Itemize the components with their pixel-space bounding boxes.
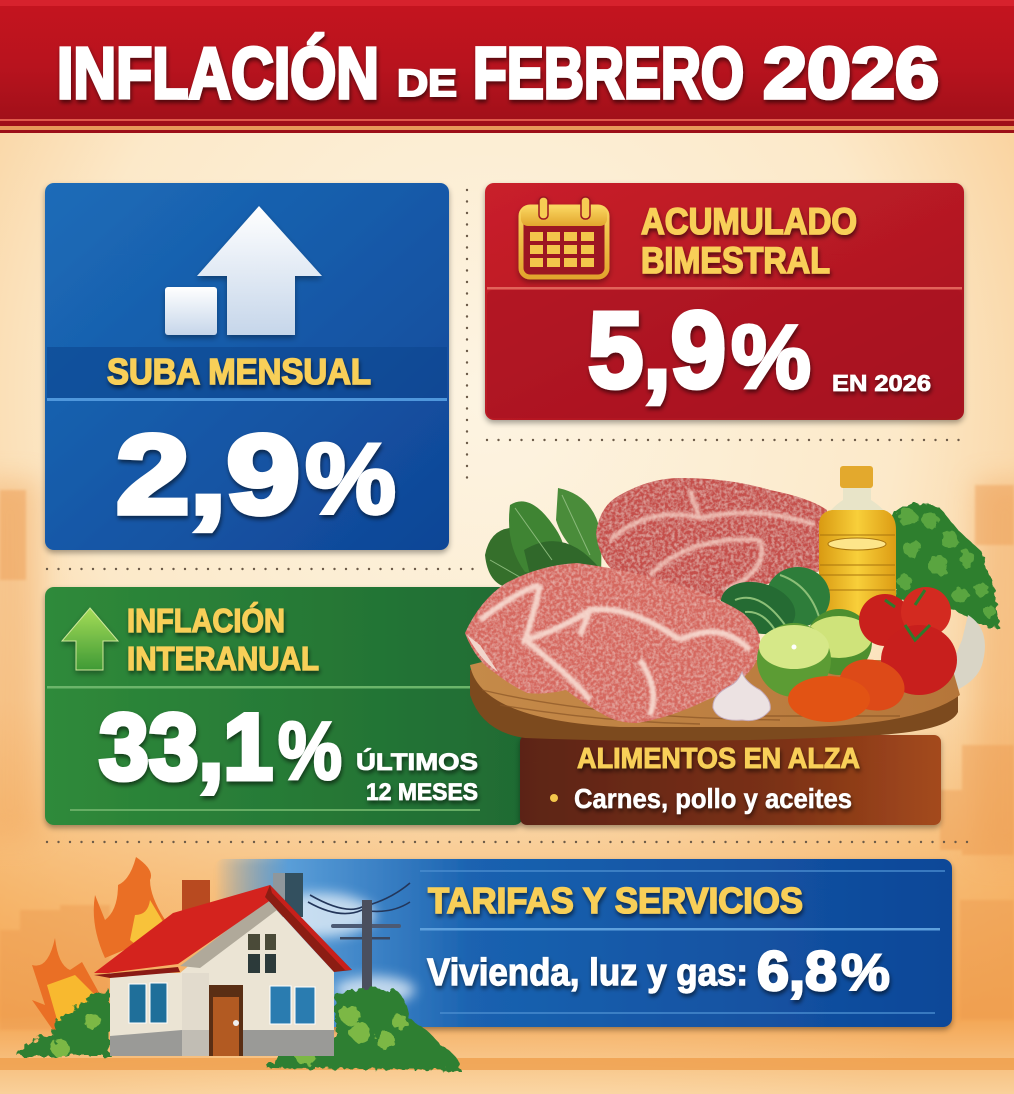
door	[209, 985, 243, 1056]
cucumbers	[715, 567, 830, 642]
bullet	[550, 794, 558, 802]
caption: en 2026: EN 2026	[832, 370, 931, 396]
meat: front cut	[465, 563, 760, 723]
heading: inflación interanual: INFLACIÓN	[127, 602, 285, 639]
header banner	[0, 0, 1014, 133]
dotted separators	[47, 190, 972, 842]
title	[57, 33, 939, 114]
heading: inflación interanual	[127, 602, 319, 677]
heading: acumulado bimestral	[641, 201, 857, 281]
value: 5,9%: 5,9	[588, 289, 726, 410]
title: DE	[397, 63, 457, 105]
title: 2026	[763, 34, 939, 114]
oil bottle	[819, 466, 896, 618]
panel: suba mensual	[45, 183, 449, 550]
caption: últimos 12 meses	[356, 748, 478, 806]
value: 5,9%: %	[731, 308, 811, 408]
panel: inflación interanual	[45, 587, 523, 825]
heading: acumulado bimestral: ACUMULADO	[641, 201, 857, 242]
illustration: bushes	[17, 988, 460, 1070]
value: 2,9%: %	[305, 423, 396, 535]
roof	[94, 967, 180, 978]
icon: green up arrow	[62, 608, 118, 670]
leaves: spinach	[485, 488, 601, 588]
house walls	[110, 900, 334, 1056]
caption: últimos 12 meses: ÚLTIMOS	[356, 748, 478, 776]
clouds behind house	[265, 893, 415, 1004]
panel: alimentos en alza	[520, 735, 941, 825]
value: 2,9%: 2,9	[116, 412, 300, 537]
illustration: flames	[32, 857, 172, 1033]
garlic	[713, 672, 770, 721]
bowl	[905, 615, 985, 703]
tomatoes	[788, 587, 957, 722]
value: 6,8%: %	[841, 944, 890, 1002]
value: 6,8%	[757, 939, 890, 1002]
icon: up arrow with step	[165, 206, 322, 335]
heading: suba mensual: SUBA MENSUAL	[107, 351, 371, 392]
board	[470, 660, 960, 741]
value: 33,1%: 33,1	[99, 694, 273, 799]
panel: tarifas y servicios	[215, 859, 952, 1027]
heading: acumulado bimestral: BIMESTRAL	[641, 240, 830, 281]
value: 5,9%	[588, 289, 811, 410]
illustration: house	[94, 873, 352, 1056]
title: INFLACIÓN	[57, 33, 379, 114]
heading: tarifas y servicios: TARIFAS Y SERVICIOS	[428, 880, 803, 921]
herbs: parsley	[892, 502, 1000, 628]
title: FEBRERO	[473, 34, 744, 114]
panel: acumulado bimestral	[485, 183, 964, 420]
illustration: utility pole	[308, 883, 410, 1015]
illustration: food on wooden board	[465, 466, 1000, 741]
value: 33,1%: %	[278, 706, 342, 797]
windows	[129, 934, 315, 1024]
icon: calendar	[521, 197, 607, 277]
limes	[757, 609, 872, 697]
text: vivienda, luz y gas: Vivienda, luz y gas:	[427, 952, 748, 994]
caption: últimos 12 meses: 12 MESES	[366, 779, 478, 806]
heading: inflación interanual: INTERANUAL	[127, 640, 319, 677]
heading: alimentos en alza: ALIMENTOS EN ALZA	[577, 743, 860, 775]
value: 2,9%	[116, 412, 396, 537]
meat: back cut	[596, 478, 827, 600]
value: 6,8%: 6,8	[757, 939, 837, 1002]
chimneys	[182, 873, 303, 922]
text: carnes, pollo y aceites: Carnes, pollo y aceites	[574, 783, 852, 814]
